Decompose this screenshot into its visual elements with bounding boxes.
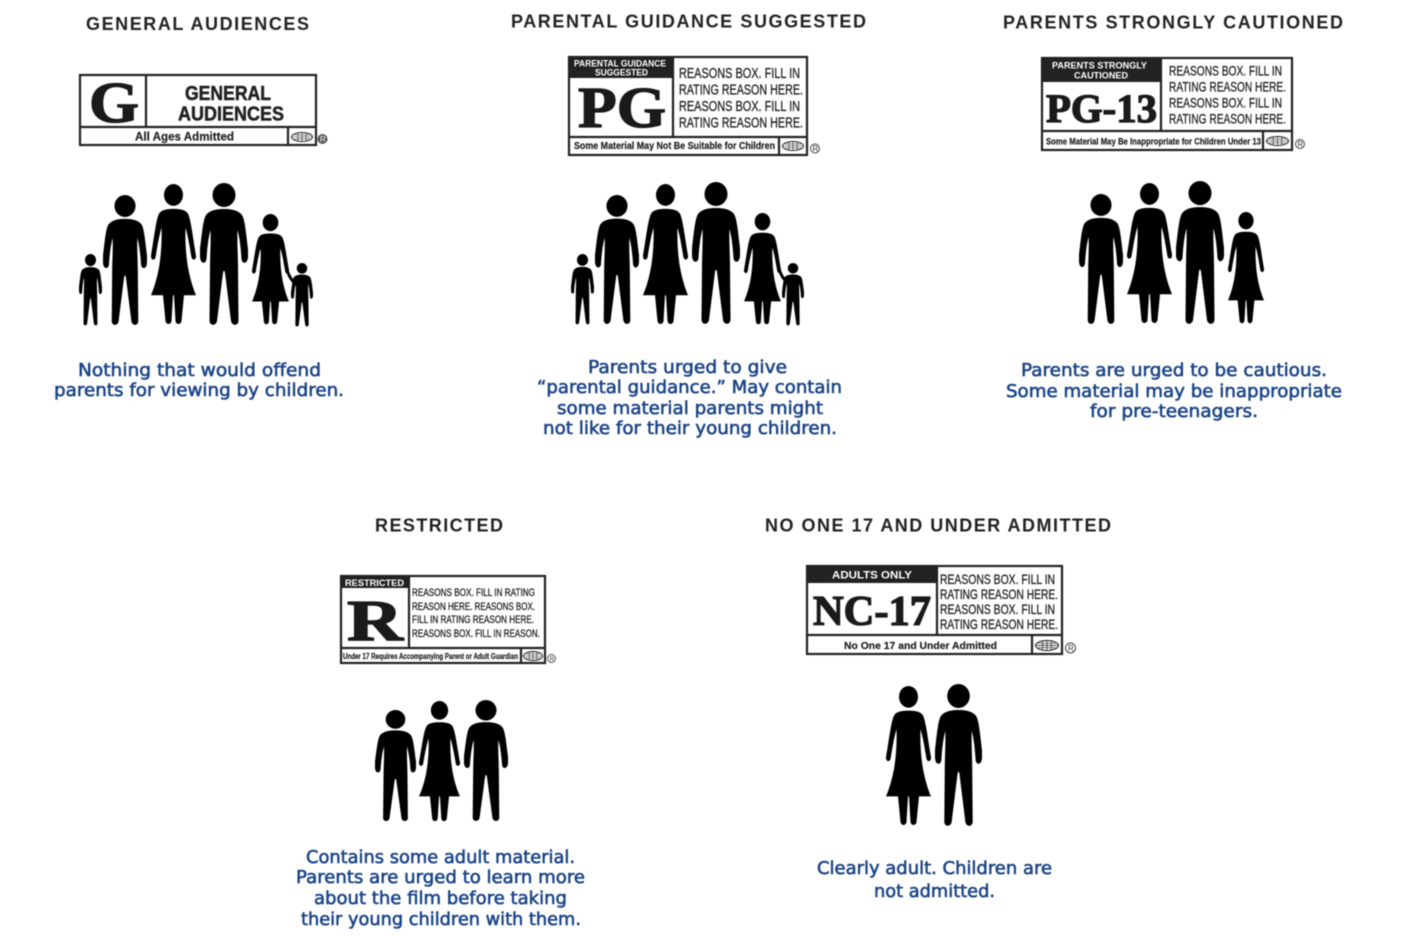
rating box: PG-13: RATING REASON HERE.	[1169, 78, 1286, 94]
description: G	[54, 360, 344, 401]
description: G: parents for viewing by children.	[54, 380, 344, 401]
description: R	[296, 847, 585, 930]
description: PG-13: for pre-teenagers.	[1090, 401, 1258, 422]
rating box: G: AUDIENCES	[178, 104, 284, 126]
rating box: PG: RATING REASON HERE.	[679, 114, 803, 132]
rating box: PG: REASONS BOX. FILL IN	[679, 98, 800, 115]
rating box: NC-17: NC-17	[813, 589, 931, 635]
rating box: R	[341, 576, 556, 663]
rating box: PG: Some Material May Not Be Suitable for Children	[574, 141, 775, 152]
description: NC-17: Clearly adult. Children are	[817, 858, 1052, 879]
description: PG-13: Some material may be inappropriate	[1006, 381, 1342, 402]
rating box: PG: SUGGESTED	[595, 68, 648, 78]
rating box: PG: PARENTAL GUIDANCE	[574, 58, 666, 68]
rating box: PG-13: PARENTS STRONGLY	[1052, 60, 1147, 70]
rating box: NC-17: No One 17 and Under Admitted	[844, 640, 997, 652]
rating box: R: R	[347, 588, 404, 653]
description: PG: “parental guidance.” May contain	[537, 377, 842, 398]
panel: NC-17 rating	[765, 516, 1111, 902]
panel: R rating	[296, 516, 585, 930]
description: PG: Parents urged to give	[588, 357, 787, 378]
family silhouettes: three figures	[375, 700, 508, 821]
rating box: PG	[569, 57, 820, 155]
description: R: Parents are urged to learn more	[296, 867, 585, 888]
rating box: PG-13: REASONS BOX. FILL IN	[1169, 62, 1282, 78]
rating box: R: REASONS BOX. FILL IN REASON.	[412, 628, 540, 640]
rating box: PG-13: REASONS BOX. FILL IN	[1169, 94, 1282, 110]
rating box: G: GENERAL	[185, 83, 271, 105]
rating box: R: FILL IN RATING REASON HERE.	[412, 614, 534, 626]
panel: PG-13 rating	[1003, 12, 1343, 422]
rating box: PG: PG	[578, 75, 666, 140]
description: R: about the film before taking	[314, 888, 567, 909]
rating box: G: G	[89, 70, 139, 135]
family silhouettes: two figures	[886, 684, 982, 826]
heading: no one 17 and under admitted: NO ONE 17 AND UNDER ADMITTED	[765, 516, 1111, 536]
family silhouettes: four figures	[1079, 181, 1264, 324]
rating box: R: R	[550, 656, 554, 663]
family silhouettes: six figures	[571, 182, 804, 325]
description: PG: some material parents might	[557, 398, 823, 419]
rating box: PG: R	[812, 144, 818, 154]
rating box: NC-17: REASONS BOX. FILL IN	[940, 601, 1055, 617]
rating box: PG-13: RATING REASON HERE.	[1169, 110, 1286, 126]
rating box: G	[80, 70, 328, 145]
rating box: G: All Ages Admitted	[135, 130, 234, 144]
description: PG-13	[1006, 360, 1342, 422]
rating box: R: REASON HERE. REASONS BOX.	[412, 601, 535, 613]
rating box: NC-17	[807, 566, 1076, 654]
panel: PG rating	[511, 12, 866, 439]
rating box: PG: REASONS BOX. FILL IN	[679, 65, 800, 82]
rating box: PG-13	[1042, 58, 1304, 150]
heading: parental guidance suggested: PARENTAL GUIDANCE SUGGESTED	[511, 12, 866, 32]
description: R: their young children with them.	[301, 909, 581, 930]
description: R: Contains some adult material.	[306, 847, 575, 868]
heading: general audiences: GENERAL AUDIENCES	[86, 14, 309, 34]
rating box: PG: RATING REASON HERE.	[679, 82, 803, 98]
rating box: NC-17: REASONS BOX. FILL IN	[940, 571, 1055, 587]
rating box: PG-13: Some Material May Be Inappropriate for Children Under 13	[1046, 136, 1261, 146]
rating box: NC-17: RATING REASON HERE.	[940, 616, 1058, 632]
rating box: PG-13: PG-13	[1046, 86, 1157, 131]
rating box: R: REASONS BOX. FILL IN RATING	[412, 587, 535, 599]
description: NC-17: not admitted.	[874, 881, 995, 902]
description: PG-13: Parents are urged to be cautious.	[1021, 360, 1327, 381]
rating box: R: Under 17 Requires Accompanying Parent or Adult Guardian	[343, 652, 518, 661]
family silhouettes: six figures	[79, 183, 313, 326]
rating box: NC-17: RATING REASON HERE.	[940, 586, 1058, 602]
rating box: R: RESTRICTED	[345, 578, 404, 589]
heading: restricted: RESTRICTED	[375, 516, 503, 536]
rating box: NC-17: R	[1068, 644, 1074, 653]
rating box: NC-17: ADULTS ONLY	[832, 570, 913, 582]
rating box: G: R	[320, 135, 326, 144]
rating box: PG-13: R	[1298, 140, 1304, 149]
description: G: Nothing that would offend	[78, 360, 321, 381]
description: NC-17	[817, 858, 1052, 902]
panel: G rating	[54, 14, 344, 401]
heading: parents strongly cautioned: PARENTS STRONGLY CAUTIONED	[1003, 12, 1343, 32]
description: PG	[537, 357, 842, 439]
rating box: PG-13: CAUTIONED	[1074, 70, 1129, 80]
description: PG: not like for their young children.	[543, 418, 837, 439]
